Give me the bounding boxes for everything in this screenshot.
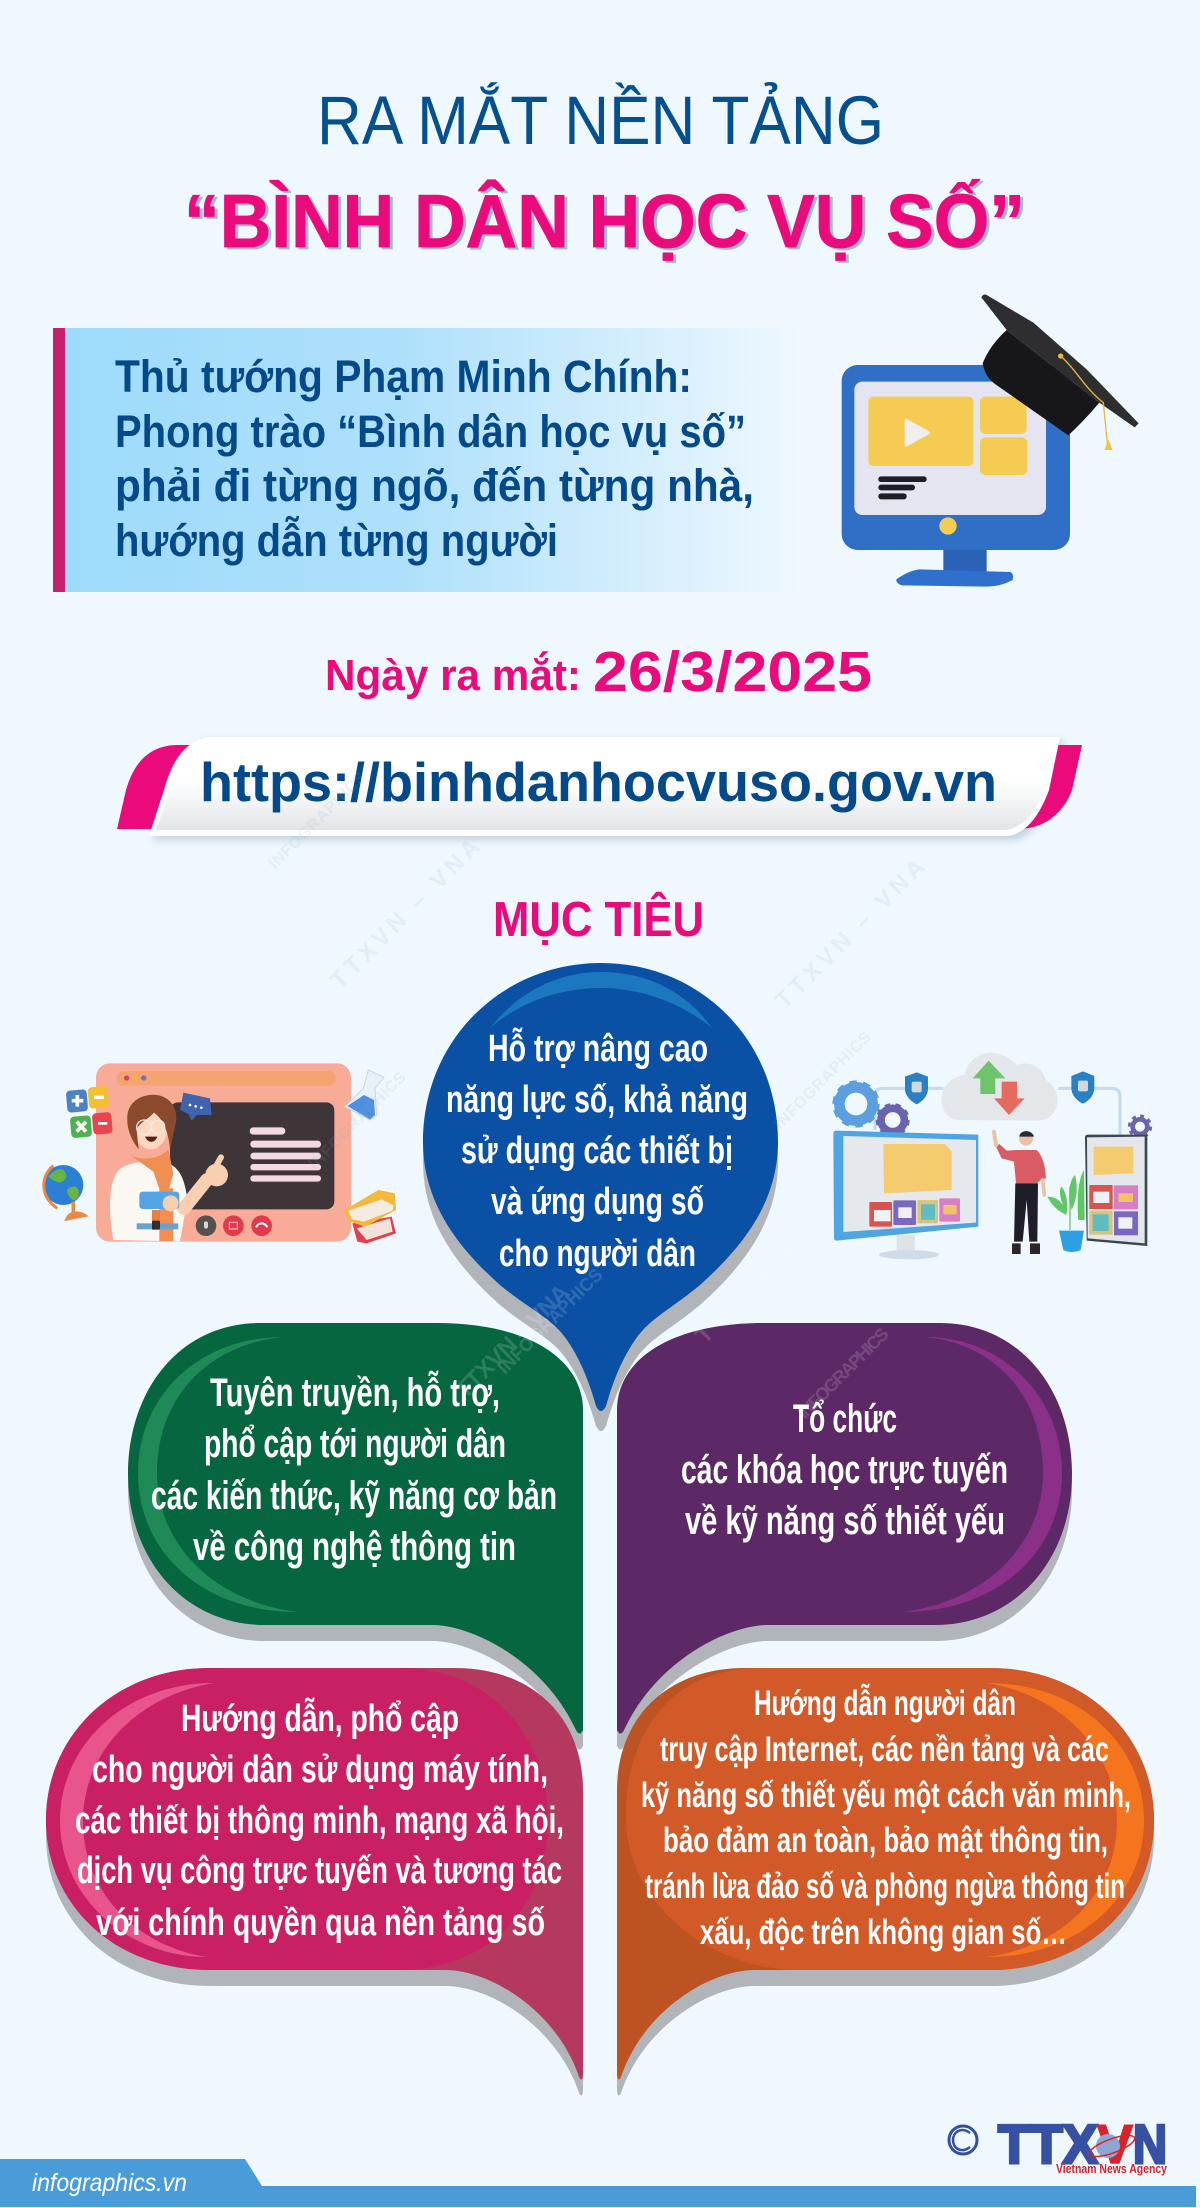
books <box>344 1190 396 1243</box>
orange text: Hướng dẫn người dân <box>754 1683 1016 1723</box>
quote text: Thủ tướng Phạm Minh Chính: <box>115 351 692 402</box>
logo: TTXVN <box>949 2113 1168 2176</box>
watermarks on bubbles: TTXVN <box>690 1238 801 1349</box>
watermarks: INFOGRAPHICS <box>266 769 370 873</box>
blue text: và ứng dụng số <box>491 1181 704 1223</box>
globe <box>43 1165 84 1219</box>
watermarks: TTXVN – VNA <box>325 834 486 994</box>
heading: objectives: MỤC TIÊU <box>493 892 704 947</box>
quote text <box>115 351 754 566</box>
watermarks <box>266 769 931 1173</box>
speech bubble <box>180 1093 212 1121</box>
watermarks: INFOGRAPHICS <box>306 1069 410 1173</box>
watermarks: INFOGRAPHICS <box>771 1029 875 1133</box>
quote text: hướng dẫn từng người <box>115 515 558 566</box>
pink text: các thiết bị thông minh, mạng xã hội, <box>75 1800 564 1842</box>
blue text: cho người dân <box>499 1233 696 1275</box>
purple text: về kỹ năng số thiết yếu <box>685 1499 1005 1543</box>
footer bar <box>0 2159 1196 2207</box>
plant <box>1047 1170 1085 1252</box>
watermarks: TTXVN – VNA <box>770 854 931 1014</box>
bubble: green <box>128 1323 583 1750</box>
url banner <box>117 737 1082 840</box>
bubble: orange <box>617 1668 1154 2096</box>
title line 2: “BÌNH DÂN HỌC VỤ SỐ” <box>187 181 1028 265</box>
pink text: cho người dân sử dụng máy tính, <box>92 1749 548 1791</box>
footer site name: infographics.vn <box>32 2169 187 2197</box>
green text: các kiến thức, kỹ năng cơ bản <box>151 1474 557 1518</box>
purple text: Tổ chức <box>793 1397 897 1441</box>
orange text: xấu, độc trên không gian số… <box>700 1913 1067 1952</box>
watermarks on bubbles: INFOGRAPHICS <box>494 1265 607 1378</box>
quote text: Phong trào “Bình dân học vụ số” <box>115 406 746 457</box>
pink text: với chính quyền qua nền tảng số <box>96 1902 545 1944</box>
illustration: cloud data and devices <box>833 1053 1151 1259</box>
green text: Tuyên truyền, hỗ trợ, <box>210 1369 500 1415</box>
blue text: sử dụng các thiết bị <box>461 1130 733 1172</box>
math tiles <box>66 1086 113 1138</box>
watermarks on bubbles: INFOGRAPHICS <box>794 1324 893 1423</box>
logo: TTXVN: V <box>1097 2113 1133 2175</box>
logo: TTXVN: N <box>1133 2113 1167 2175</box>
url text: https://binhdanhocvuso.gov.vn <box>200 751 997 813</box>
title line 1: RA MẮT NỀN TẢNG <box>317 82 884 159</box>
icon: monitor with graduation cap <box>842 295 1139 587</box>
pink text: dịch vụ công trực tuyến và tương tác <box>77 1850 562 1892</box>
purple text: các khóa học trực tuyến <box>681 1448 1008 1492</box>
green text: phổ cập tới người dân <box>204 1422 506 1466</box>
launch date: 26/3/2025 <box>593 640 872 704</box>
launch date: Ngày ra mắt: <box>325 650 581 700</box>
person <box>994 1131 1046 1254</box>
title line 2: “BÌNH DÂN HỌC VỤ SỐ” <box>184 179 1025 263</box>
blue text <box>446 1026 748 1275</box>
quote text: phải đi từng ngõ, đến từng nhà, <box>115 460 754 511</box>
illustration: online teacher <box>43 1063 396 1243</box>
bubble: purple <box>617 1323 1072 1750</box>
watermarks on bubbles <box>450 1238 893 1423</box>
tablet <box>1085 1135 1147 1246</box>
teacher <box>110 1095 228 1241</box>
bubble: pink <box>46 1668 583 2096</box>
desktop monitor <box>833 1131 978 1259</box>
pink text <box>75 1696 564 1944</box>
blue text: năng lực số, khả năng <box>446 1079 748 1121</box>
shields <box>905 1071 1094 1104</box>
green text: về công nghệ thông tin <box>193 1525 516 1569</box>
orange text <box>641 1683 1131 1952</box>
logo: TTXVN: Vietnam News Agency <box>1056 2161 1168 2176</box>
watermarks on bubbles: TTXVN – VNA <box>450 1279 575 1404</box>
logo: TTXVN: TTX <box>998 2113 1098 2175</box>
pink text: Hướng dẫn, phổ cập <box>181 1696 459 1740</box>
blue text: Hỗ trợ nâng cao <box>488 1026 708 1070</box>
green text <box>151 1369 557 1569</box>
panel: prime minister quote <box>53 328 805 592</box>
flask <box>345 1070 384 1120</box>
gears <box>835 1083 1151 1137</box>
purple text <box>681 1397 1008 1543</box>
bubble: blue <box>423 963 778 1431</box>
cloud <box>941 1053 1058 1121</box>
launch date <box>325 640 872 704</box>
